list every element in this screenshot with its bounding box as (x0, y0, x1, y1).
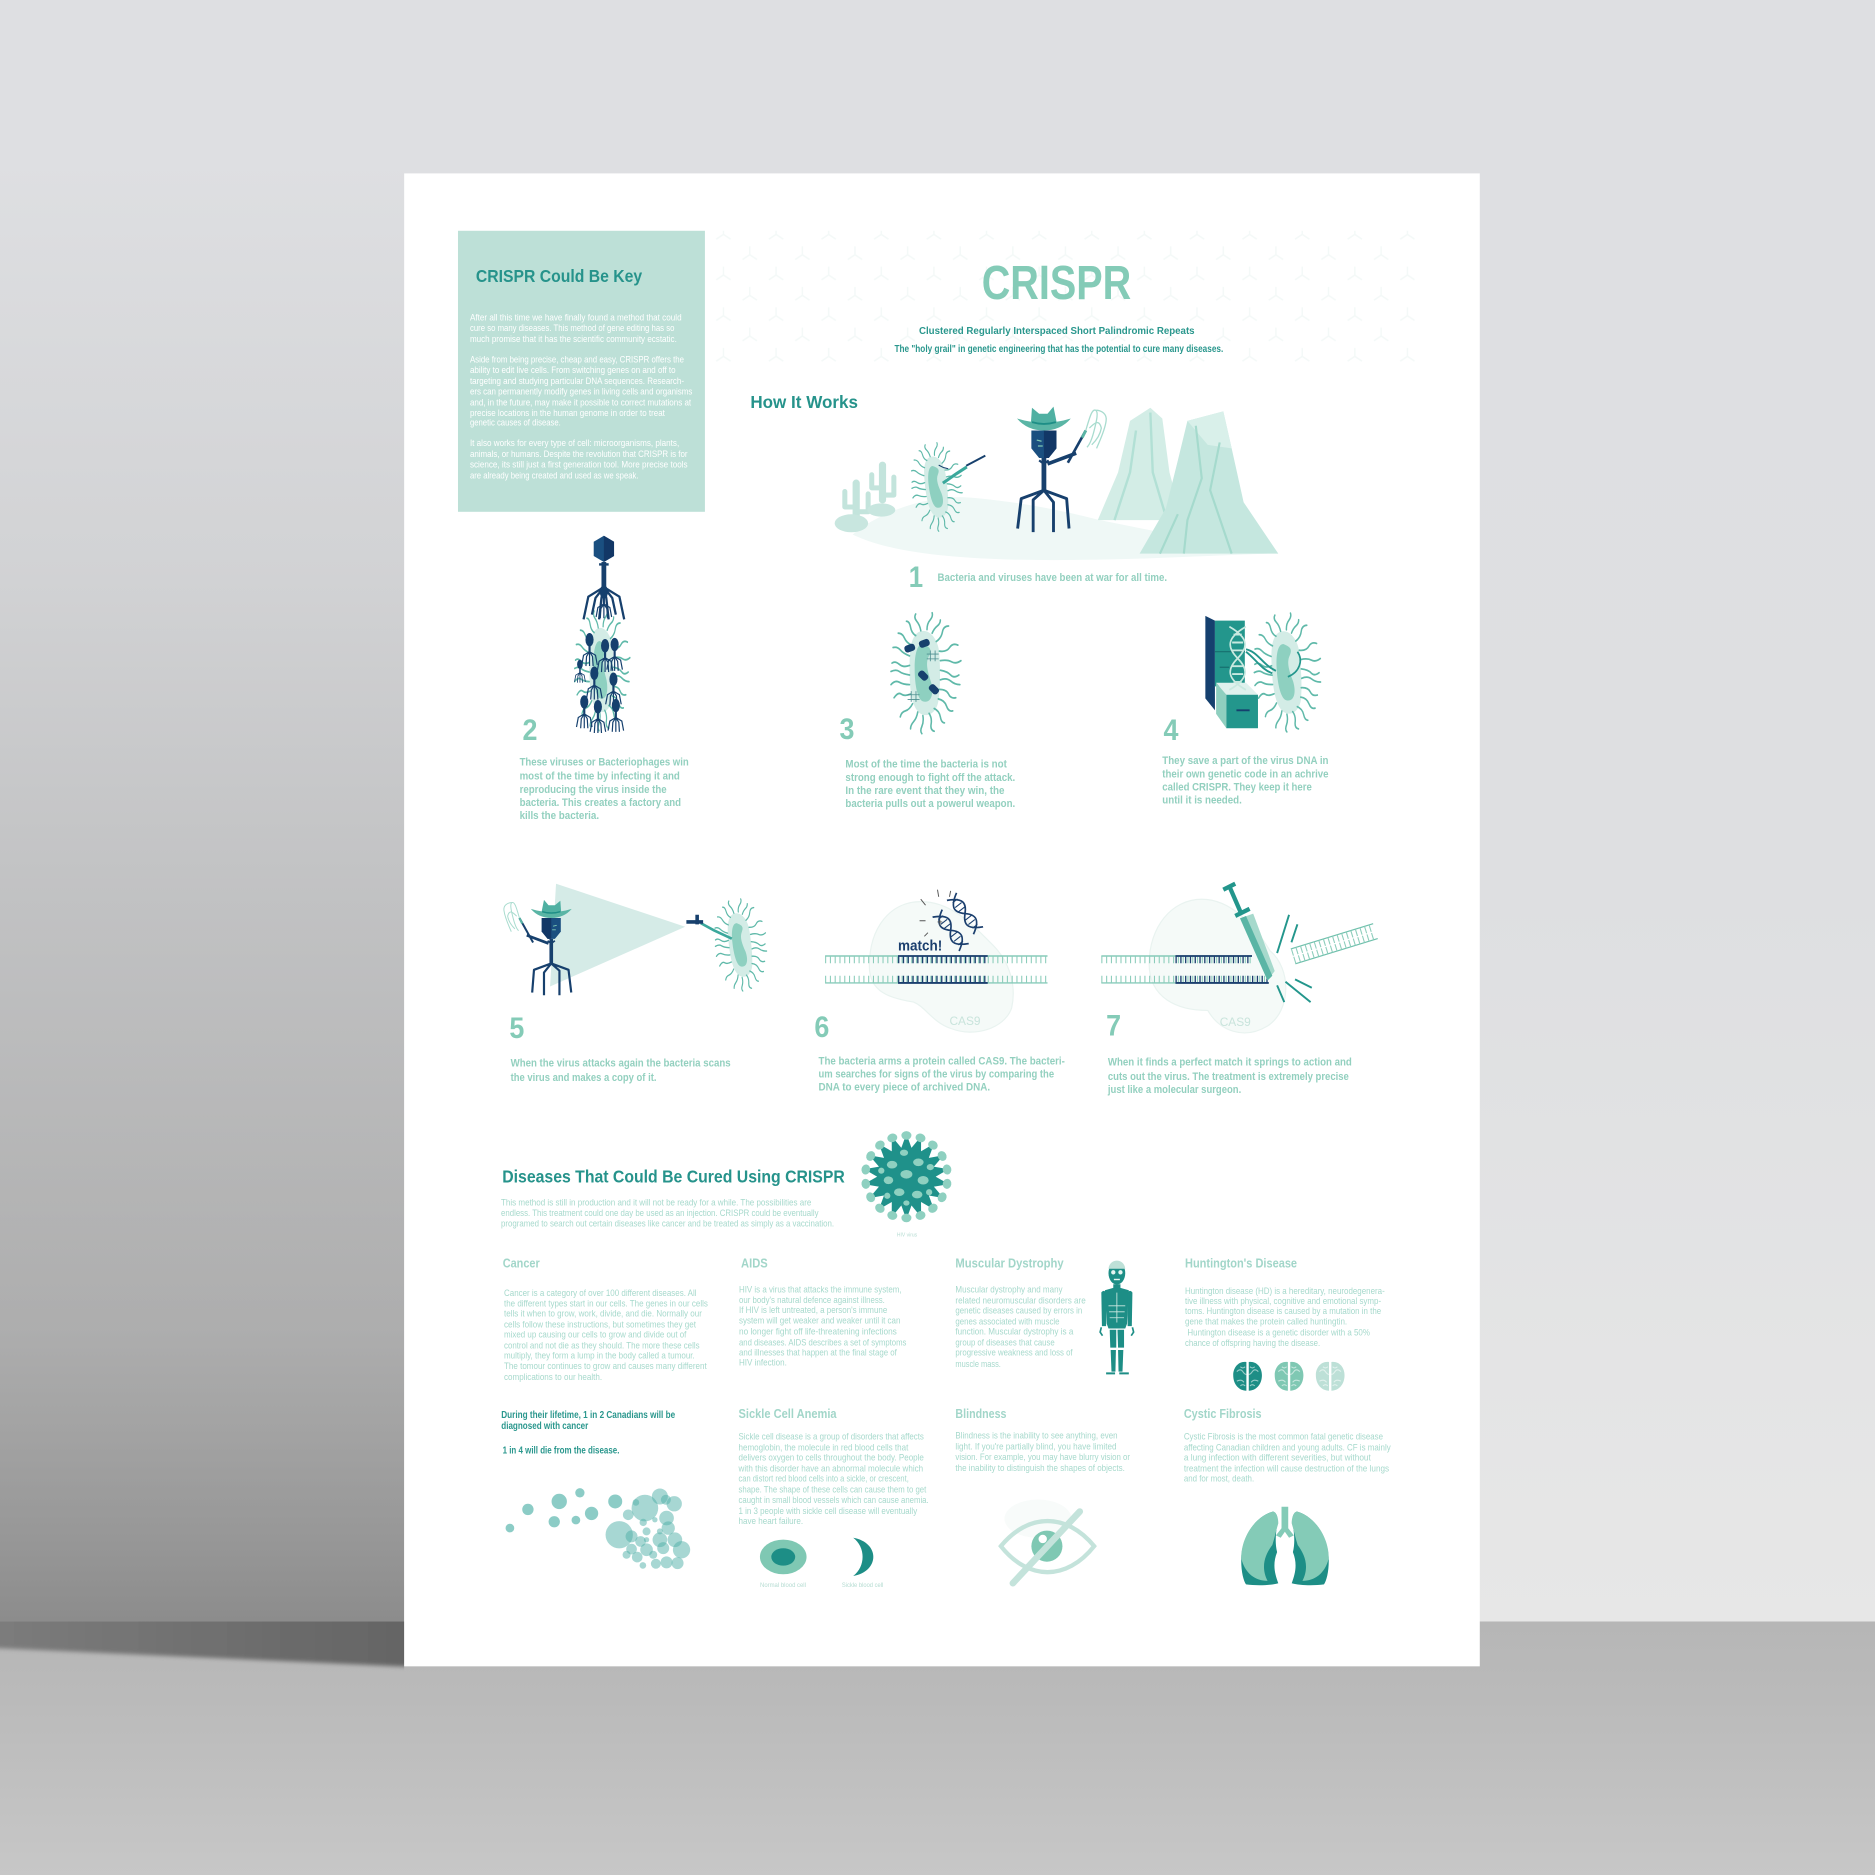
step 3 illustration: wounded bacterium (891, 613, 961, 734)
icon: cancer cells spreading (506, 1488, 690, 1569)
tagline: The "holy grail" in genetic engineering that has the potential to cure many diseases. (894, 344, 1224, 355)
AIDS text (739, 1285, 907, 1368)
title: CRISPR (982, 257, 1131, 310)
icon: sickle blood cell (842, 1538, 883, 1589)
step 3 caption (845, 759, 1015, 810)
sickle cell text (738, 1432, 929, 1526)
diseases intro text (501, 1197, 834, 1228)
step 5 caption: the virus and makes a copy of it. (511, 1072, 656, 1084)
step 4 caption: their own genetic code in an achrive (1162, 768, 1329, 780)
match label: match! (898, 939, 942, 955)
step 4 caption: They save a part of the virus DNA in (1162, 755, 1329, 767)
step 2 caption: bacteria. This creates a factory and (520, 797, 681, 809)
panel: Huntington's Disease (1185, 1257, 1385, 1391)
CAS9 protein (1149, 899, 1286, 1033)
cystic fibrosis heading: Cystic Fibrosis (1184, 1407, 1262, 1421)
cancer text: cells follow these instructions, but sometimes they get (504, 1319, 696, 1329)
DNA strands (825, 956, 1048, 983)
sickle cell heading: Sickle Cell Anemia (739, 1407, 837, 1421)
huntington text: Huntington disease (HD) is a hereditary, neurodegenera- (1185, 1286, 1385, 1296)
cancer text: complications to our health. (504, 1372, 602, 1382)
muscular dystrophy heading: Muscular Dystrophy (955, 1257, 1064, 1271)
cancer text (504, 1288, 708, 1382)
cancer statistics: During their lifetime, 1 in 2 Canadians will be (501, 1410, 676, 1421)
DNA strands (1101, 956, 1269, 983)
removed DNA fragment (1291, 924, 1378, 964)
AIDS text: and illnesses that happen at the final stage of (739, 1347, 897, 1357)
DNA helices (920, 890, 983, 951)
step 7 caption: cuts out the virus. The treatment is extremely precise (1108, 1071, 1349, 1083)
header pattern (714, 231, 1415, 365)
panel body text: ability to edit live cells. From switching genes on and off to (470, 365, 676, 375)
blindness text: light. If you're partially blind, you have limited (955, 1441, 1117, 1451)
panel body text: much promise that it has the scientific community ecstatic. (470, 334, 677, 344)
icon: three brains (1233, 1362, 1345, 1391)
AIDS text: If HIV is left untreated, a person's immune (739, 1305, 887, 1315)
sickle cell text: Sickle cell disease is a group of disorders that affects (739, 1432, 924, 1442)
panel: Cystic Fibrosis (1184, 1407, 1391, 1585)
icon: crossed-out eye (1001, 1500, 1094, 1583)
step 5 caption (511, 1058, 731, 1084)
background wall and floor (0, 592, 1875, 1875)
subtitle: Clustered Regularly Interspaced Short Palindromic Repeats (919, 326, 1195, 337)
AIDS text: system will get weaker and weaker until it can (739, 1316, 900, 1326)
step 2 caption: most of the time by infecting it and (520, 771, 680, 783)
step 2 caption: kills the bacteria. (520, 810, 599, 822)
step 1 number: 1 (909, 561, 923, 594)
blindness text: the inability to distinguish the shapes of objects. (955, 1463, 1125, 1473)
cut sparks (1277, 915, 1312, 1002)
step 3 number: 3 (839, 713, 854, 746)
panel body text: are already being created and used as we speak. (470, 470, 639, 480)
muscular dystrophy text: Muscular dystrophy and many (955, 1285, 1063, 1295)
CAS9 protein: CAS9 (1220, 1015, 1251, 1029)
muscular dystrophy text: muscle mass. (955, 1359, 1001, 1369)
AIDS heading: AIDS (741, 1257, 768, 1271)
cancer text: mixed up causing our cells to grow and divide out of (504, 1330, 687, 1340)
muscular dystrophy text: related neuromuscular disorders are (955, 1295, 1086, 1305)
huntington text (1185, 1286, 1385, 1348)
muscular dystrophy text (955, 1285, 1086, 1369)
heading: Diseases That Could Be Cured Using CRISPR: Diseases That Could Be Cured Using CRISPR (502, 1167, 845, 1187)
panel body text: cure so many diseases. This method of gene editing has so (470, 323, 674, 333)
step 3 caption: strong enough to fight off the attack. (845, 772, 1015, 784)
HIV virus caption: HIV virus (897, 1232, 917, 1238)
icon: lungs (1241, 1507, 1329, 1585)
sickle cell text: can distort red blood cells into a sickle, or crescent, (739, 1474, 909, 1484)
step 6 caption (819, 1055, 1065, 1094)
step 3 caption: In the rare event that they win, the (845, 785, 1004, 797)
muscular dystrophy text: genes associated with muscle (955, 1316, 1059, 1326)
step 2 caption: reproducing the virus inside the (520, 784, 667, 796)
step 6 caption: DNA to every piece of archived DNA. (819, 1082, 990, 1094)
step 1 illustration: desert standoff (835, 407, 1278, 560)
huntington text: Huntington disease is a genetic disorder with a 50% (1187, 1328, 1370, 1338)
sickle cell text: hemoglobin, the molecule in red blood cells that (739, 1442, 909, 1452)
heading: How It Works: How It Works (750, 392, 858, 412)
AIDS text: HIV infection. (739, 1358, 787, 1368)
diseases intro text: This method is still in production and it will not be ready for a while. The possibilities are (501, 1197, 811, 1207)
diseases intro text: endless. This treatment could one day be used as an injection. CRISPR could be eventually (501, 1208, 819, 1218)
panel: Blindness (955, 1407, 1130, 1583)
step 4 caption (1162, 755, 1329, 807)
muscular dystrophy text: group of diseases that cause (955, 1337, 1055, 1347)
step 5 number: 5 (509, 1012, 524, 1045)
step 4 caption: called CRISPR. They keep it here (1162, 781, 1312, 793)
step 1 caption: Bacteria and viruses have been at war for all time. (937, 572, 1167, 584)
step 7 illustration: CAS9 cutting DNA (1101, 884, 1378, 1033)
cancer heading: Cancer (503, 1257, 540, 1271)
muscular dystrophy text: genetic diseases caused by errors in (955, 1306, 1082, 1316)
blindness text: vision. For example, you may have blurry vision or (955, 1452, 1130, 1462)
step 6 caption: The bacteria arms a protein called CAS9. The bacteri- (819, 1055, 1065, 1067)
AIDS text: and diseases. AIDS describes a set of symptoms (739, 1337, 907, 1347)
cancer statistics: 1 in 4 will die from the disease. (503, 1445, 620, 1456)
step 2 number: 2 (523, 714, 538, 747)
cystic fibrosis text (1184, 1432, 1391, 1484)
panel body text: precise locations in the human genome in order to treat (470, 408, 665, 418)
cancer statistics (501, 1410, 676, 1456)
huntington text: gene that makes the protein called huntingtin. (1185, 1316, 1347, 1326)
step 6 number: 6 (814, 1011, 829, 1044)
AIDS text: HIV is a virus that attacks the immune system, (739, 1285, 902, 1295)
step 3 caption: Most of the time the bacteria is not (845, 759, 1007, 771)
CAS9 protein: CAS9 (949, 1014, 981, 1028)
panel body text: science, its still just a first generation tool. More precise tools (470, 460, 688, 470)
huntington heading: Huntington's Disease (1185, 1257, 1297, 1271)
diseases intro text: programed to search out certain diseases like cancer and be treated as simply as a vaccination. (501, 1218, 834, 1228)
cystic fibrosis text: Cystic Fibrosis is the most common fatal genetic disease (1184, 1432, 1383, 1442)
panel body text: Aside from being precise, cheap and easy, CRISPR offers the (470, 354, 684, 364)
step 4 illustration: archive cabinet and bacterium (1205, 612, 1324, 733)
cancer text: the different types start in our cells. The genes in our cells (504, 1298, 708, 1308)
cystic fibrosis text: affecting Canadian children and young adults. CF is mainly (1184, 1442, 1391, 1452)
panel body text: ers can permanently modify genes in living cells and organisms (470, 387, 693, 397)
panel: AIDS (739, 1257, 907, 1368)
step 6 caption: um searches for signs of the virus by comparing the (819, 1068, 1054, 1080)
step 2 illustration: viruses infecting bacterium (575, 536, 630, 733)
scalpel (1223, 884, 1275, 981)
cancer statistics: diagnosed with cancer (501, 1421, 588, 1432)
cactus and rocks (835, 465, 895, 532)
cancer text: tells it when to grow, work, divide, and die. Normally our (504, 1309, 702, 1319)
sickle cell text: delivers oxygen to cells throughout the body. People (739, 1453, 924, 1463)
panel: Sickle Cell Anemia (738, 1407, 929, 1589)
step 2 caption (520, 756, 689, 822)
panel body text: genetic causes of disease. (470, 418, 561, 428)
step 5 illustration: bacterium scanning the virus (504, 884, 771, 995)
AIDS text: no longer fight off life-threatening infections (739, 1327, 897, 1337)
blindness heading: Blindness (955, 1407, 1007, 1421)
cancer text: Cancer is a category of over 100 different diseases. All (504, 1288, 697, 1298)
panel body text: After all this time we have finally found a method that could (470, 312, 682, 322)
step 7 number: 7 (1106, 1010, 1121, 1043)
AIDS text: our body's natural defence against illness. (739, 1295, 885, 1305)
panel body text: It also works for every type of cell: microorganisms, plants, (470, 438, 679, 448)
sickle cell text: shape. The shape of these cells can cause them to get (739, 1484, 927, 1494)
icon: sickle blood cell: Sickle blood cell (842, 1583, 883, 1589)
muscular dystrophy text: function. Muscular dystrophy is a (955, 1327, 1074, 1337)
sickle cell text: have heart failure. (739, 1516, 803, 1526)
CAS9 protein (869, 902, 1013, 1032)
icon: normal blood cell (760, 1540, 807, 1589)
bacterium with gun (907, 441, 985, 534)
huntington text: toms. Huntington disease is caused by a mutation in the (1185, 1306, 1381, 1316)
cystic fibrosis text: treatment the infection will cause destruction of the lungs (1184, 1463, 1390, 1473)
sickle cell text: caught in small blood vessels which can cause anemia. (739, 1495, 929, 1505)
icon: normal blood cell: Normal blood cell (760, 1583, 806, 1589)
cystic fibrosis text: a lung infection with different severities, but without (1184, 1453, 1371, 1463)
step 3 caption: bacteria pulls out a powerul weapon. (845, 798, 1015, 810)
huntington text: tive illness with physical, cognitive and emotional symp- (1185, 1296, 1381, 1306)
cancer text: control and not die as they should. The more these cells (504, 1340, 700, 1350)
blindness text: Blindness is the inability to see anything, even (955, 1431, 1118, 1441)
step 4 number: 4 (1164, 714, 1179, 747)
panel body text: and, in the future, may make it possible to correct mutations at (470, 397, 692, 407)
panel body text: targeting and studying particular DNA sequences. Research- (470, 376, 684, 386)
icon: human muscular figure (1100, 1261, 1134, 1373)
panel: Muscular Dystrophy (955, 1257, 1134, 1373)
step 6 illustration: CAS9 DNA match (825, 890, 1048, 1032)
panel body text (470, 312, 693, 480)
panel: Cancer (501, 1257, 708, 1569)
step 7 caption: When it finds a perfect match it springs to action and (1108, 1056, 1352, 1068)
blindness text (955, 1431, 1130, 1473)
step 2 caption: These viruses or Bacteriophages win (520, 756, 689, 768)
panel heading: CRISPR Could Be Key (476, 266, 642, 286)
sickle cell text: 1 in 3 people with sickle cell disease will eventually (739, 1506, 918, 1516)
muscular dystrophy text: progressive weakness and loss of (955, 1348, 1073, 1358)
panel: CRISPR Could Be Key (458, 231, 705, 512)
icon: HIV virus (861, 1131, 952, 1222)
poster sheet (404, 173, 1480, 1666)
step 7 caption (1107, 1056, 1352, 1096)
cowboy virus (1017, 407, 1106, 532)
cystic fibrosis text: and for most, death. (1184, 1474, 1254, 1484)
sickle cell text: with this disorder have an abnormal molecule which (738, 1463, 923, 1473)
step 4 caption: until it is needed. (1162, 795, 1242, 807)
cancer text: multiply, they form a lump in the body called a tumour. (504, 1350, 695, 1360)
cancer text: The tomour continues to grow and causes many different (504, 1361, 707, 1371)
step 7 caption: just like a molecular surgeon. (1107, 1084, 1241, 1096)
huntington text: chance of offspring having the disease. (1185, 1338, 1320, 1348)
panel body text: animals, or humans. Despite the revolution that CRISPR is for (470, 449, 688, 459)
step 5 caption: When the virus attacks again the bacteria scans (511, 1058, 731, 1070)
